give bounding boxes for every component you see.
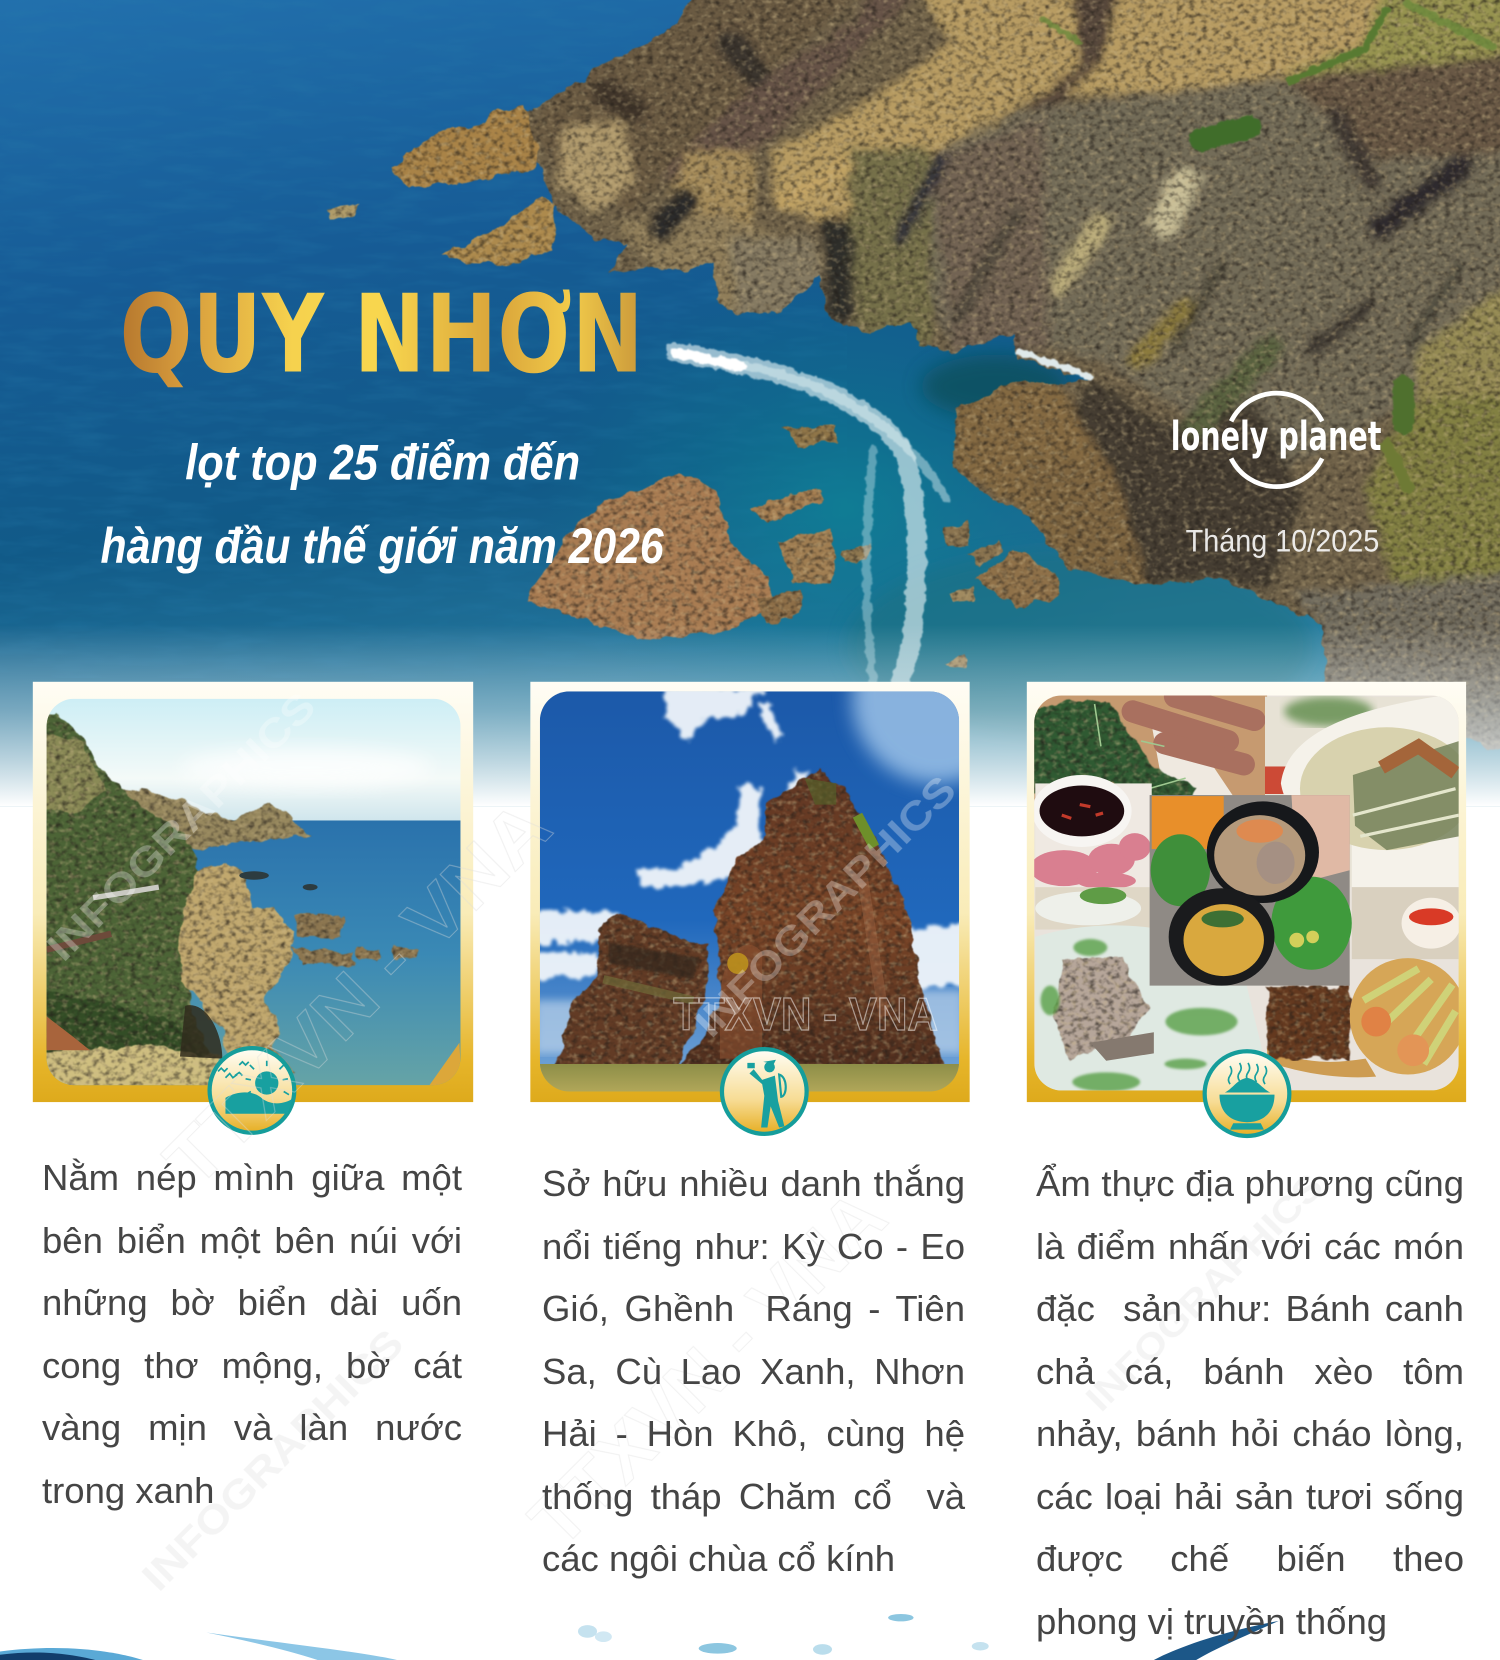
watermark: photo overlays	[38, 683, 965, 1046]
watermark: TTXVN outlines: TTXVN - VNA	[514, 1174, 902, 1562]
hero photo: aerial view of coast	[0, 0, 1500, 807]
bay rocks	[326, 108, 1062, 669]
text block: cuisine description: đặc sản như: Bánh canh	[1036, 1288, 1464, 1329]
text block: landmarks description: các ngôi chùa cổ kính	[542, 1538, 895, 1579]
watermark: TTXVN outlines: TTXVN - VNA	[148, 784, 566, 1202]
text block: landmarks description: Hải - Hòn Khô, cùng hệ	[542, 1413, 965, 1454]
logo: lonely planet	[1171, 393, 1381, 487]
text block: cuisine description: được chế biến theo	[1036, 1538, 1464, 1579]
title: QUY NHƠN: QUY NHƠN	[120, 273, 644, 398]
card 2: Banh It towers photo	[530, 682, 970, 1102]
text block: landmarks description: Sa, Cù Lao Xanh, Nhơn	[542, 1350, 965, 1392]
bottom waves and droplets	[0, 1614, 1279, 1660]
text block: landmarks description: Gió, Ghềnh Ráng - Tiên	[542, 1288, 965, 1329]
text block: cuisine description: Ẩm thực địa phương cũng	[1036, 1163, 1464, 1204]
watermark: TTXVN outlines	[148, 784, 902, 1562]
text block: cuisine description: là điểm nhấn với các món	[1036, 1226, 1464, 1266]
subtitle line 1: lọt top 25 điểm đến	[185, 435, 580, 491]
card 1: coast photo	[32, 682, 473, 1102]
text block: coast description: bên biển một bên núi với	[42, 1220, 462, 1260]
text block: coast description: vàng mịn và làn nước	[42, 1407, 462, 1448]
text block: cuisine description: nhảy, bánh hỏi cháo lòng,	[1036, 1413, 1464, 1454]
watermark: photo overlays: INFOGRAPHICS	[38, 683, 324, 970]
vegetation and surf on land	[1018, 3, 1493, 487]
text block: landmarks description: nổi tiếng như: Kỳ Co - Eo	[542, 1226, 965, 1266]
watermark: photo overlays: INFOGRAPHICS	[686, 767, 965, 1046]
watermark: faint text on white	[133, 1165, 1331, 1600]
watermark: faint text on white: INFOGRAPHICS	[133, 1321, 412, 1600]
text block: cuisine description	[1036, 1163, 1464, 1642]
text block: cuisine description: phong vị truyền thống	[1036, 1600, 1387, 1642]
icon: hiker	[722, 1049, 807, 1134]
icon: coast and sun	[210, 1048, 294, 1133]
card 3: local food collage	[1022, 682, 1474, 1102]
logo: lonely planet: lonely planet	[1171, 414, 1381, 460]
watermark: TTXVN outline on tower: TTXVN - VNA	[673, 988, 938, 1040]
text block: coast description: những bờ biển dài uốn	[42, 1282, 462, 1323]
text block: coast description: Nằm nép mình giữa một	[42, 1157, 462, 1198]
icon: steaming bowl	[1205, 1051, 1289, 1136]
text block: coast description	[42, 1157, 462, 1510]
text block: coast description: cong thơ mộng, bờ cát	[42, 1344, 462, 1386]
text block: cuisine description: các loại hải sản tươi sống	[1036, 1476, 1464, 1516]
watermark: faint text on white: INFOGRAPHICS	[1078, 1165, 1331, 1419]
land mass	[498, 0, 1500, 783]
subtitle line 2: hàng đầu thế giới năm 2026	[101, 518, 664, 574]
boat wake	[675, 353, 945, 693]
date: Tháng 10/2025	[1186, 523, 1379, 559]
text block: landmarks description: Sở hữu nhiều danh thắng	[542, 1163, 965, 1204]
text block: coast description: trong xanh	[42, 1470, 214, 1510]
text block: landmarks description: thống tháp Chăm cổ và	[542, 1476, 965, 1516]
text block: landmarks description	[542, 1163, 966, 1579]
text block: cuisine description: chả cá, bánh xèo tôm	[1036, 1350, 1464, 1392]
